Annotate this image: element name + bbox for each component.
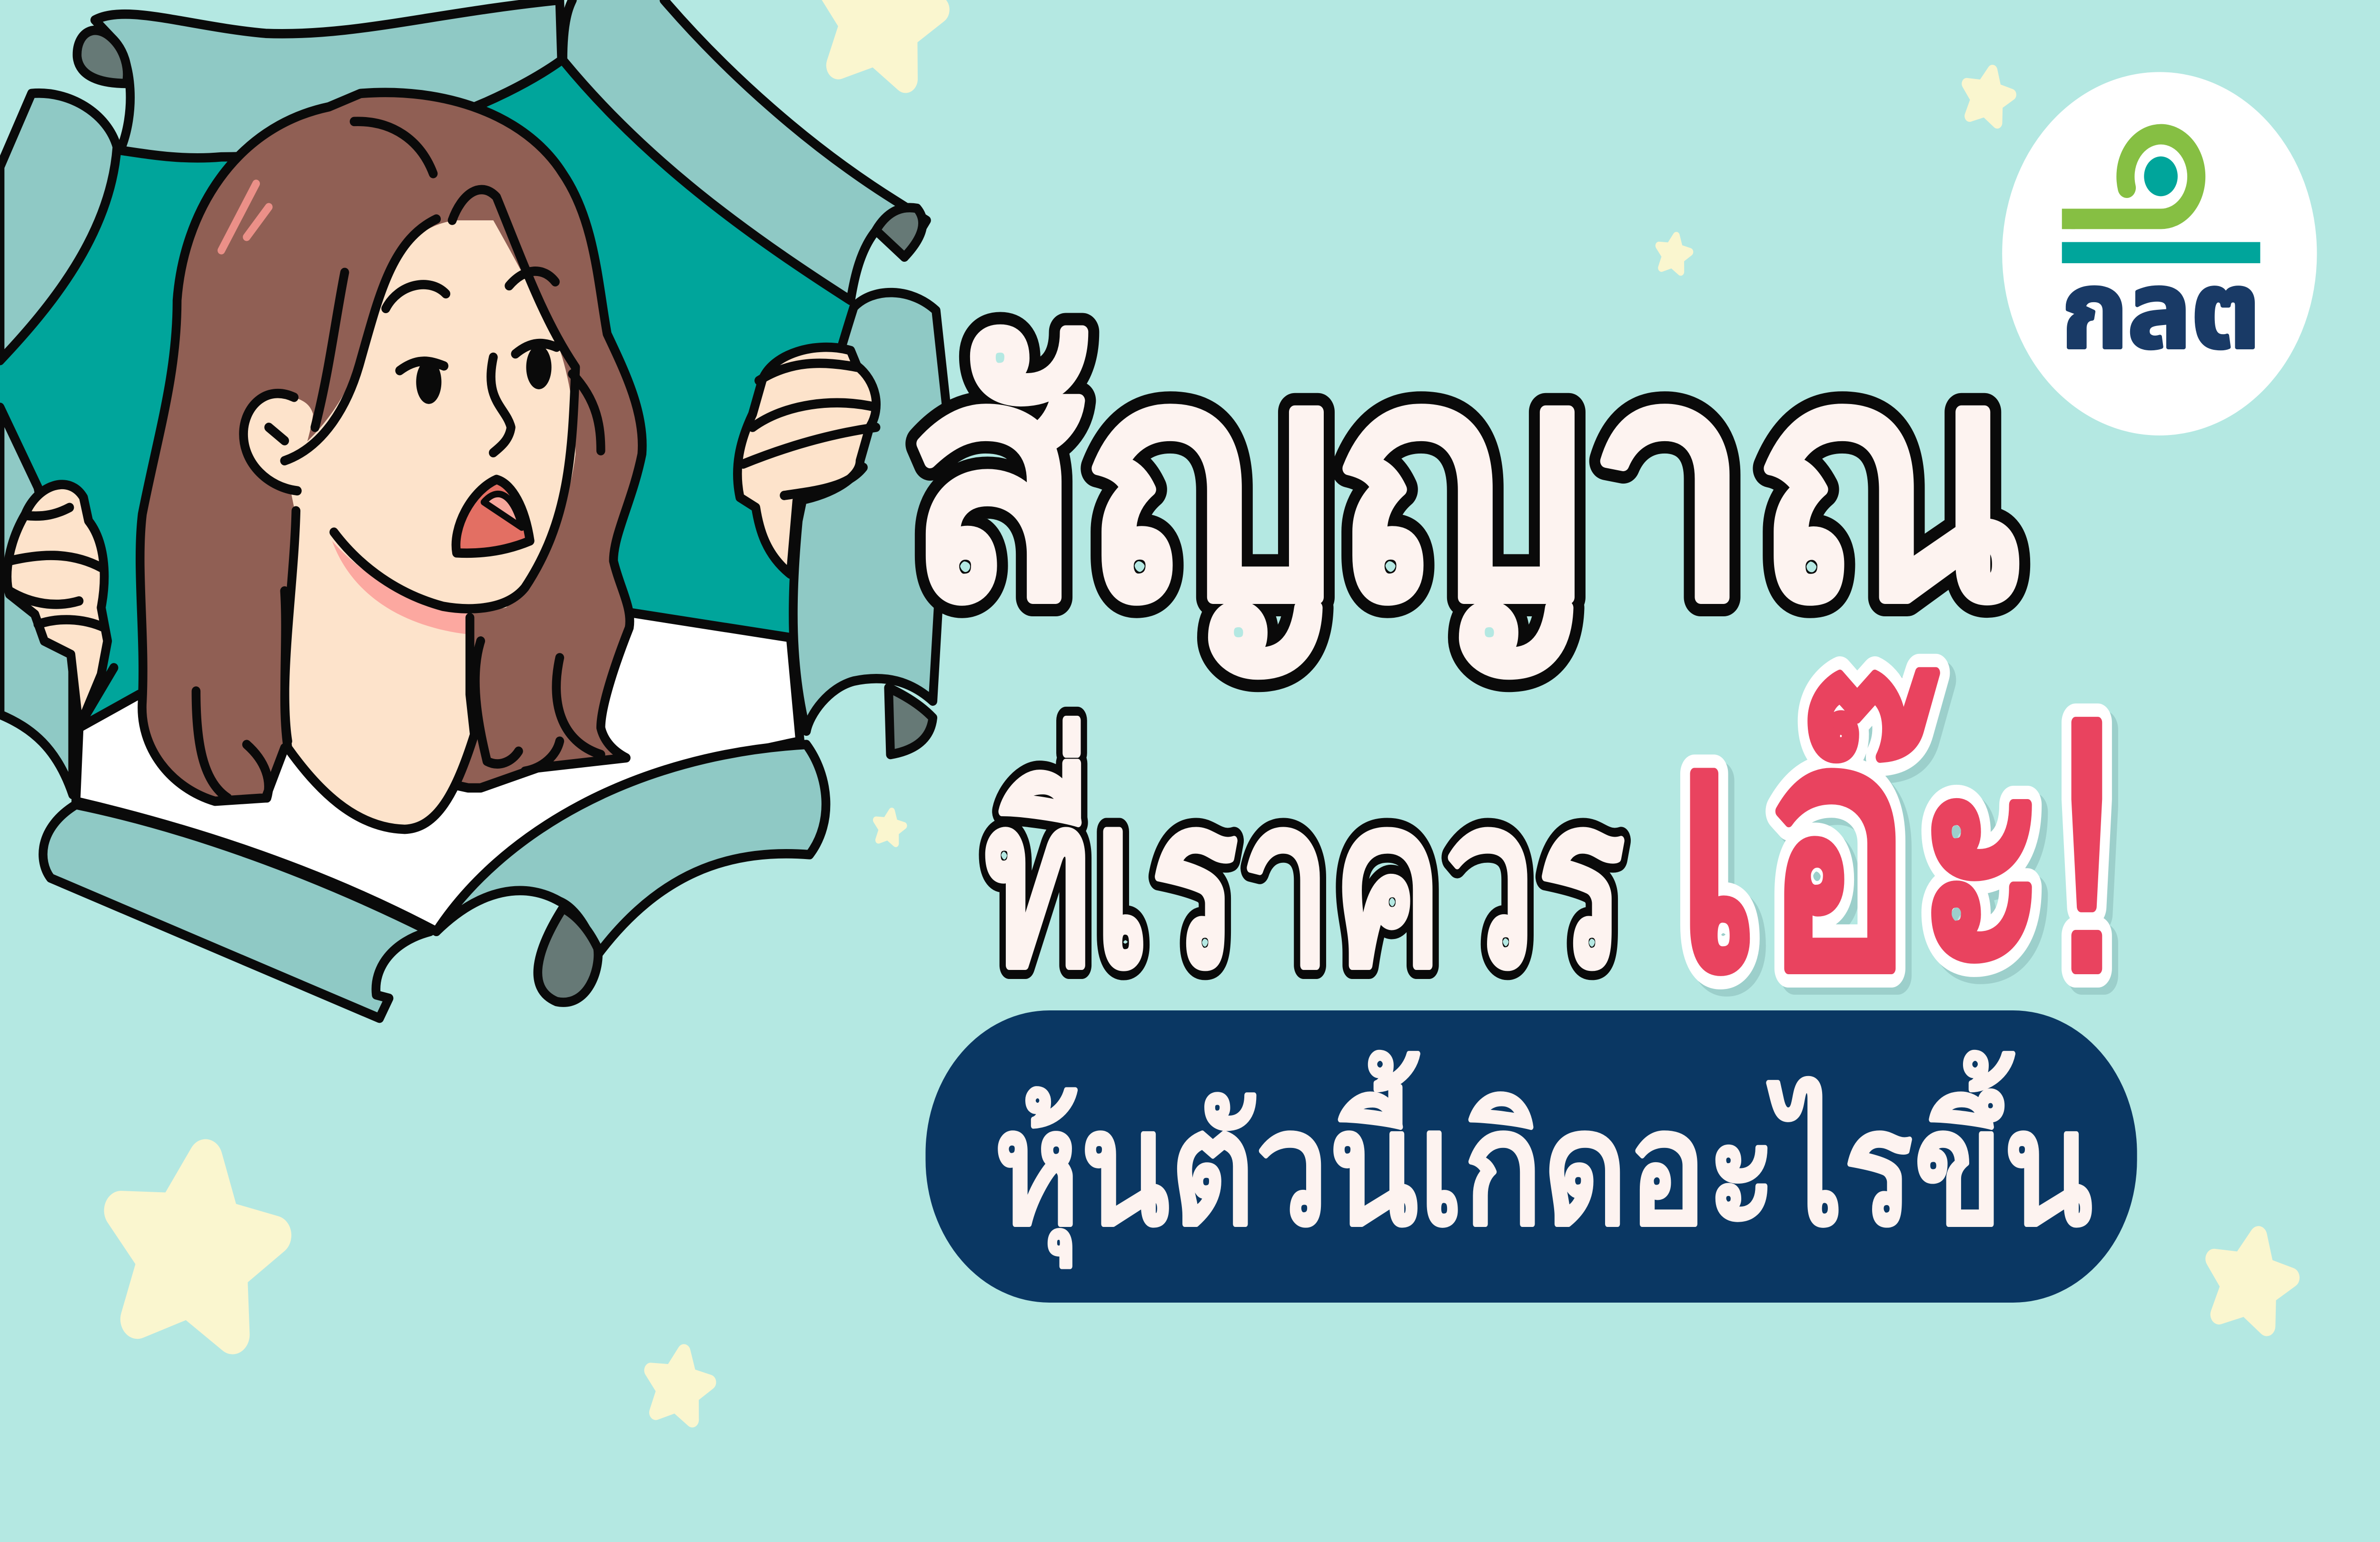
eyes [416, 360, 441, 404]
title highlight: เอ๊ะ! [1674, 570, 2122, 1122]
white shirt [76, 613, 800, 931]
left hand [7, 484, 114, 728]
mouth [456, 479, 530, 553]
ear [244, 394, 313, 491]
title line 1: สัญญาณ [905, 215, 2024, 744]
right scroll [793, 293, 949, 731]
logo mark: dot [2144, 157, 2178, 196]
title line 1: สัญญาณ [905, 215, 2024, 744]
subtitle pill [925, 1010, 2137, 1303]
right hand [737, 347, 876, 574]
bottom left scroll [43, 805, 430, 1018]
right curl [889, 688, 933, 754]
top scroll [95, 0, 562, 158]
title highlight: เอ๊ะ! [1674, 570, 2122, 1122]
title line 2: ที่เราควร [983, 692, 1626, 1070]
logo [2002, 72, 2317, 435]
lower left scroll [0, 407, 73, 795]
logo wordmark: กลต [2062, 251, 2260, 370]
neck and face [285, 220, 575, 830]
teal hole [0, 60, 854, 728]
hair highlight [221, 184, 269, 250]
logo mark: spiral [2072, 134, 2196, 219]
face lines [196, 121, 601, 830]
top right scroll [563, 0, 926, 300]
top scroll curl [77, 30, 127, 83]
chin shadow [332, 541, 471, 634]
left scroll [0, 93, 117, 361]
illustration: woman peeking through torn paper [0, 0, 949, 1018]
subtitle text: หุ้นตัวนี้เกิดอะไรขึ้น [994, 1038, 2093, 1296]
logo bar [2062, 242, 2260, 263]
bottom right scroll [436, 744, 826, 955]
title line 2: ที่เราควร [983, 692, 1626, 1070]
top right curl [876, 208, 922, 257]
bottom curl [538, 908, 598, 1002]
hair [140, 92, 642, 801]
title highlight: เอ๊ะ! [1680, 577, 2128, 1129]
